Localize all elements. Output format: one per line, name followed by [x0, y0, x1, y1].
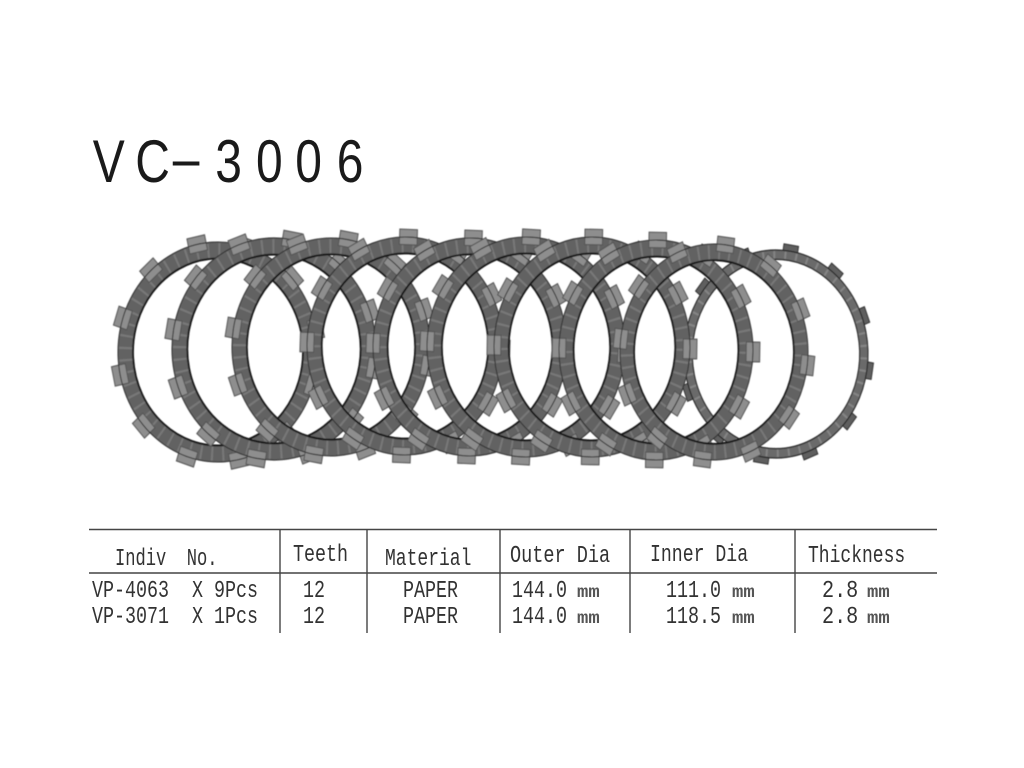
table row: VP-4063 [92, 576, 890, 605]
clutch ring 2 [148, 211, 400, 487]
table header row: Teeth [293, 542, 348, 569]
table row: VP-3071 [92, 602, 890, 631]
table row: VP-3071: mm [867, 608, 890, 629]
clutch ring 8 [550, 230, 762, 470]
table row: VP-4063: mm [732, 582, 755, 603]
table header row [115, 542, 905, 573]
table row: VP-4063: mm [577, 582, 600, 603]
table header row: Thickness [808, 543, 905, 570]
table header row: Material [385, 546, 471, 573]
table row: VP-3071: 12 [303, 604, 325, 631]
table row: VP-3071: X 1Pcs [192, 604, 258, 631]
clutch ring 6 [415, 223, 637, 471]
table row: VP-4063: 2.8 [822, 576, 858, 605]
clutch ring 7 [485, 227, 699, 467]
table row: VP-4063: 12 [303, 578, 325, 605]
table row: VP-4063: 111.0 [666, 578, 721, 605]
clutch ring 3 [208, 212, 454, 482]
table row: VP-3071: 2.8 [822, 602, 858, 631]
table row: VP-3071: PAPER [403, 604, 458, 631]
table row: VP-3071: 144.0 [512, 604, 567, 631]
table row: VP-4063: X 9Pcs [192, 578, 258, 605]
clutch ring 10 [664, 228, 888, 480]
table header row: Inner Dia [650, 542, 748, 569]
table row: VP-3071: mm [577, 608, 600, 629]
table row: VP-3071: 118.5 [666, 604, 721, 631]
table grid lines [89, 530, 937, 633]
clutch ring 4 [297, 225, 513, 467]
table row: VP-4063: VP-4063 [92, 578, 169, 605]
title: VC–3006 [93, 125, 363, 195]
table row: VP-4063: mm [867, 582, 890, 603]
table row: VP-4063: 144.0 [512, 578, 567, 605]
table row: VP-4063: PAPER [403, 578, 458, 605]
product image: clutch plate rings [83, 204, 888, 500]
clutch ring 9 [602, 223, 826, 481]
table header row: Indiv No. [115, 546, 218, 573]
table header row: Outer Dia [510, 543, 610, 570]
table row: VP-3071: mm [732, 608, 755, 629]
specification table [89, 530, 937, 633]
table row: VP-3071: VP-3071 [92, 604, 169, 631]
clutch ring 5 [363, 226, 577, 468]
clutch ring 1 [83, 204, 353, 500]
